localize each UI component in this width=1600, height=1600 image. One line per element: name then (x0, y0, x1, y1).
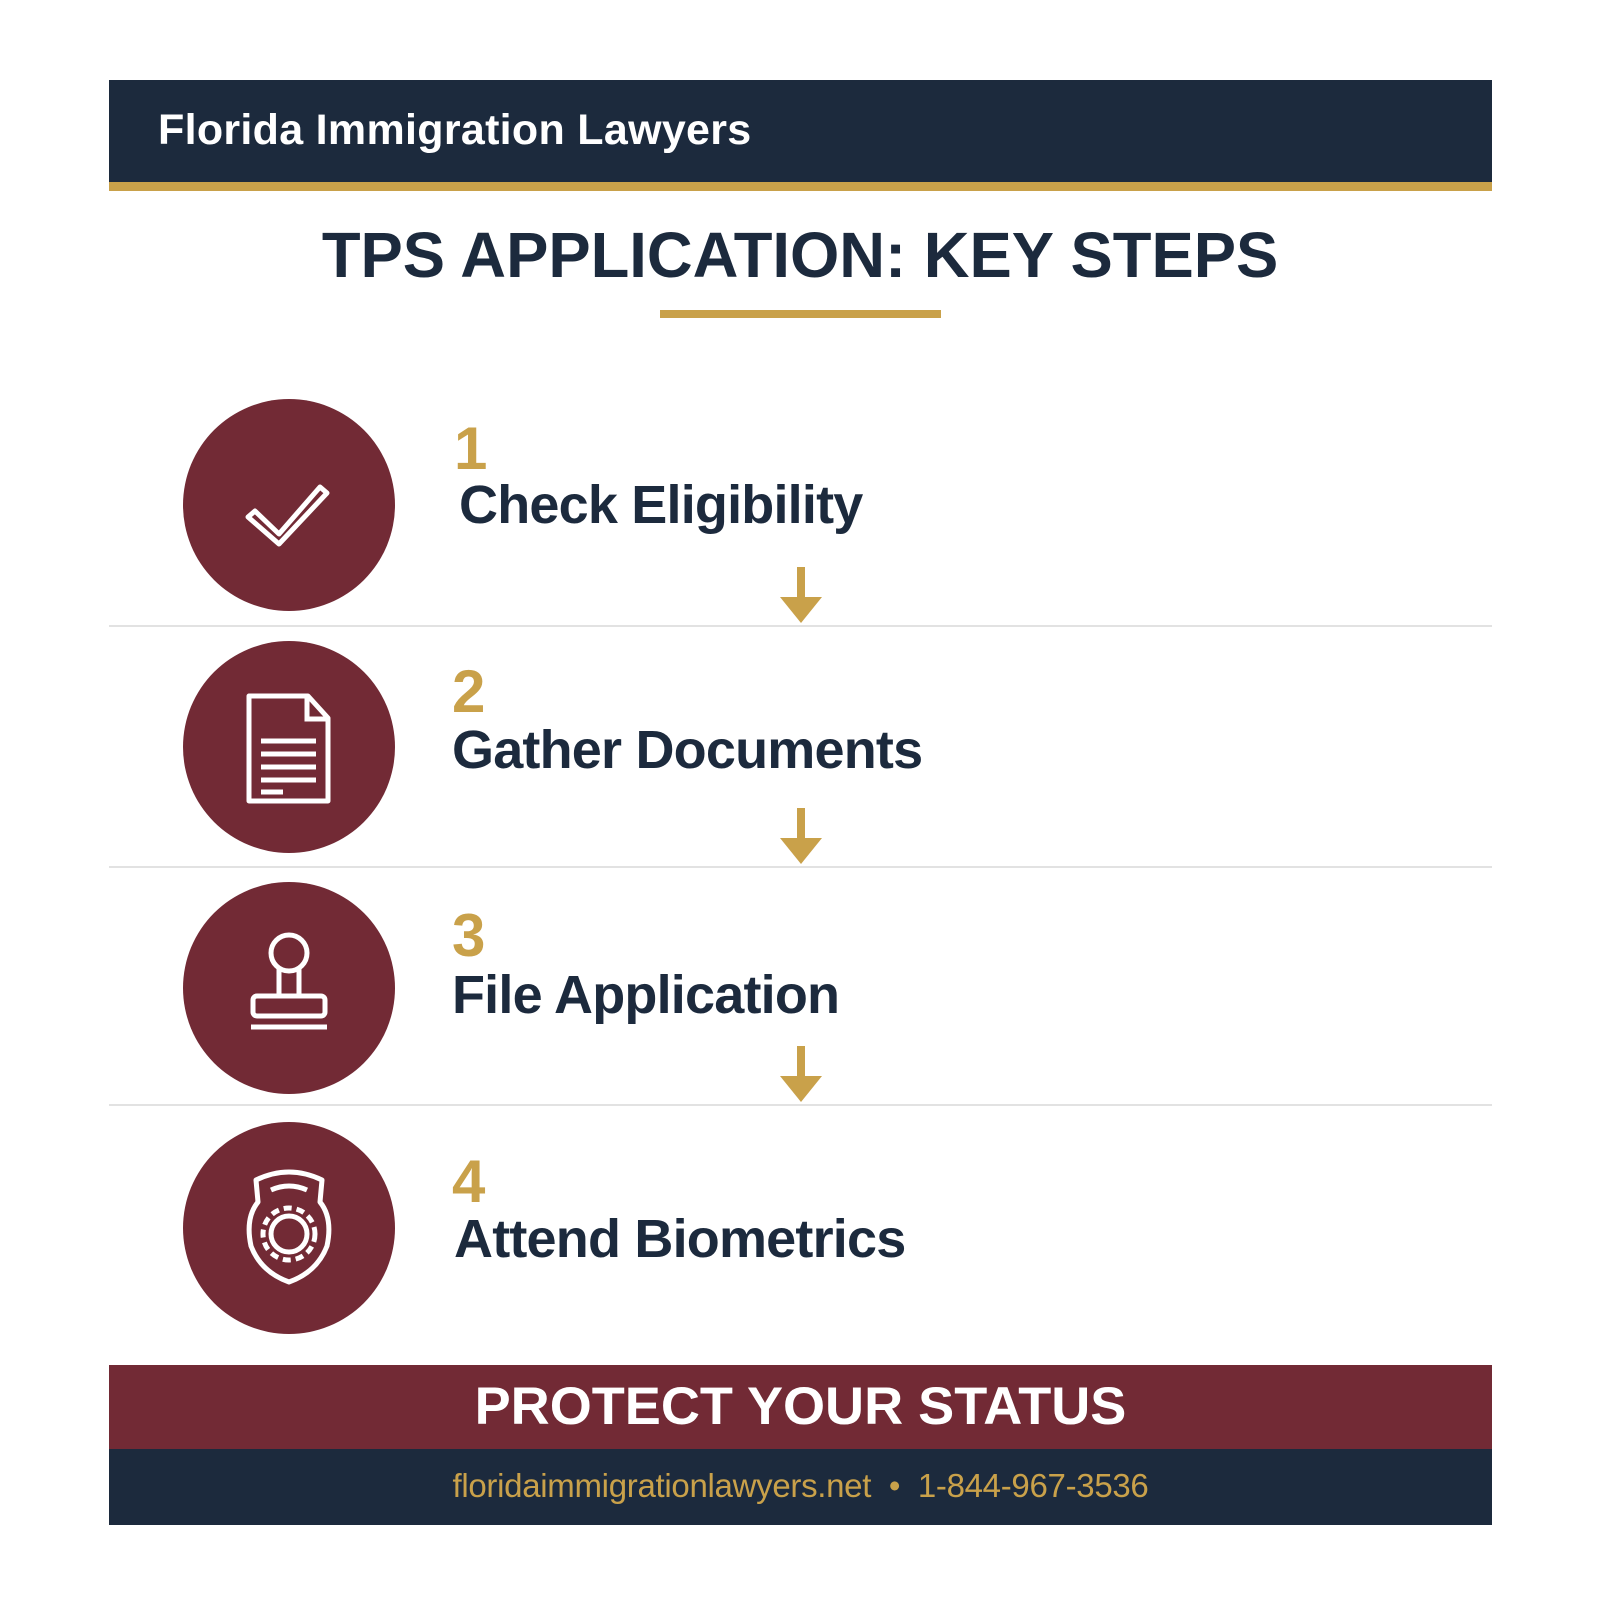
header bar (109, 80, 1492, 182)
title: TPS APPLICATION: KEY STEPS (322, 219, 1278, 291)
arrow 1 (780, 567, 822, 623)
arrow 3 (780, 1046, 822, 1102)
footer red bar with slogan: PROTECT YOUR STATUS (475, 1377, 1126, 1436)
header text: Florida Immigration Lawyers (158, 106, 752, 154)
footer contact: floridaimmigrationlawyers.net • 1-844-967-3536 (452, 1467, 1148, 1504)
step 3 label: File Application (452, 965, 839, 1025)
arrow 2 (780, 808, 822, 864)
step 2 number: 2 (452, 658, 485, 725)
footer contact (109, 1449, 1492, 1525)
step 1 number: 1 (454, 415, 487, 482)
icon: badge circle (183, 1122, 395, 1334)
icon: document circle (183, 641, 395, 853)
step 4 label: Attend Biometrics (454, 1209, 905, 1269)
header gold stripe (109, 182, 1492, 191)
icon: stamp circle (183, 882, 395, 1094)
step 2 label: Gather Documents (452, 720, 922, 780)
step 3 number: 3 (452, 902, 485, 969)
step 1 label: Check Eligibility (459, 475, 863, 535)
footer red bar with slogan (109, 1365, 1492, 1449)
title underline (660, 310, 941, 318)
icon: checkmark circle (183, 399, 395, 611)
step 4 number: 4 (452, 1148, 485, 1215)
footer banner (109, 1365, 1492, 1525)
